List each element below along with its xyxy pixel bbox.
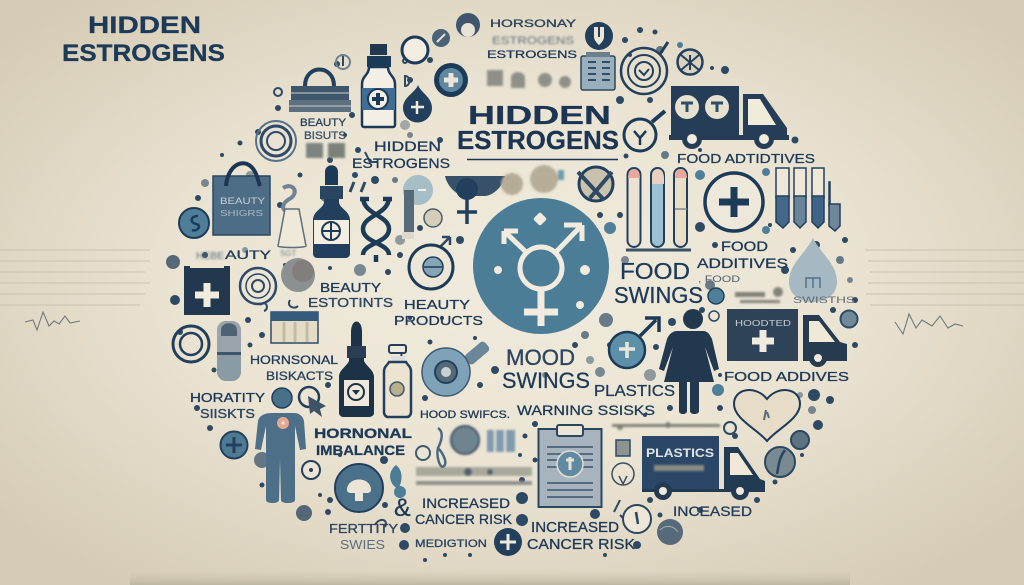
text: beauty estotints: ESTOTINTS — [308, 296, 393, 310]
text: beauty estotints — [308, 281, 393, 310]
icon: tube lamp — [402, 175, 433, 239]
icon: top navy disc — [585, 22, 613, 50]
gender symbol — [504, 225, 582, 326]
text: beauty row: SGT — [280, 249, 297, 258]
icon: three test tubes — [626, 168, 691, 250]
icon: shopping tote top — [289, 70, 351, 112]
icon cluster — [166, 13, 858, 562]
icon: dial ring — [409, 245, 453, 289]
heading: hidden estrogens — [457, 100, 619, 160]
text: increased cancer risk left — [415, 495, 513, 527]
corner title: HIDDEN — [88, 12, 201, 39]
text: increased cancer risk left: INCREASED — [422, 495, 510, 511]
icon: plus disc — [220, 432, 248, 458]
text: beauty label: BISUTS — [304, 130, 346, 142]
text: hidden estrogens small: ESTROGENS — [352, 155, 450, 171]
icon: instrument box — [581, 52, 615, 90]
icon: plus disc — [434, 63, 468, 97]
icon: discs — [765, 431, 809, 477]
text: horsonay estrogens top — [487, 18, 577, 61]
icon: light bottle — [384, 345, 411, 417]
icon: medicine bottle — [362, 44, 395, 127]
icon: pale discs — [501, 165, 564, 195]
icon: rings — [240, 268, 276, 304]
icon: small sphere — [424, 209, 442, 227]
icon: dumbbell dial — [422, 340, 491, 396]
icon: shopping bag — [213, 163, 270, 235]
icon: small ornament — [390, 465, 402, 489]
icon: small disc — [708, 288, 724, 304]
left ECG line — [25, 312, 80, 330]
icon: woman figure — [659, 309, 719, 414]
icon: hooded truck: HOODTED — [735, 318, 791, 328]
icon: person figure — [255, 388, 306, 503]
text: horatity sisks — [190, 391, 266, 421]
text: food addives: FOOD ADDIVES — [724, 369, 849, 384]
icon: medical box — [184, 266, 230, 315]
text: hornsonal biskacts: BISKACTS — [266, 371, 333, 383]
icon: plus disc — [494, 528, 522, 556]
text: warning signs: WARNING SSISKS — [517, 402, 655, 418]
text: hornsonal biskacts: HORNSONAL — [250, 355, 339, 367]
icon: shopping bag: SHIGRS — [220, 209, 263, 218]
icon: sphere — [281, 258, 315, 292]
text: food additives stacked: ADDITIVES — [697, 256, 788, 271]
icon: capsule — [217, 321, 241, 381]
icon: blurred row — [487, 70, 571, 88]
icon: male symbol disc — [609, 318, 659, 368]
text: horsonay estrogens top: HORSONAY — [490, 18, 577, 30]
text: horsonay estrogens top: ESTROGENS — [487, 49, 577, 61]
text: hormonal imbalance: HORNONAL — [314, 425, 413, 441]
icon: ring — [402, 37, 428, 63]
icon: vials — [776, 168, 840, 231]
icon: cone — [278, 209, 306, 248]
icon: magnifier — [624, 111, 665, 151]
text: food swings: SWINGS — [614, 282, 703, 308]
icon: wheel — [678, 50, 702, 74]
icon: ring — [173, 326, 209, 362]
icon: target with handle — [621, 42, 668, 94]
text: mood swings — [502, 345, 590, 393]
text: hidden estrogens small: HIDDEN — [374, 138, 441, 154]
text: beauty estotints: BEAUTY — [320, 281, 382, 295]
text: beauty label: BEAUTY — [300, 117, 347, 129]
text: plastics: PLASTICS — [594, 383, 675, 400]
text: food additives stacked: FOOD — [721, 239, 768, 254]
icon: dropper bottle — [313, 165, 350, 258]
icon: heart — [734, 390, 800, 441]
icon: plus ring — [705, 173, 763, 231]
text: beauty row: AUTY — [225, 248, 271, 262]
icon: plastics truck: PLASTICS — [646, 448, 714, 460]
icon: DNA helix — [360, 197, 392, 262]
icon: box — [271, 312, 318, 343]
text: hornsonal biskacts — [250, 355, 339, 383]
corner title — [62, 12, 225, 67]
icon: sex symbol small — [445, 176, 505, 224]
icon: small disc and grid — [451, 426, 515, 454]
icon: small squares — [306, 143, 345, 158]
icon: crossed ring — [578, 167, 613, 201]
big central circle with gender symbol — [473, 198, 609, 334]
text: food additives stacked — [697, 239, 788, 284]
text: hood swifcs: HOOD SWIFCS. — [420, 409, 510, 421]
text: increased cancer risk right: INCREASED — [531, 520, 619, 536]
corner title: ESTROGENS — [62, 40, 225, 67]
text: fertility swies: FERTTITY — [329, 521, 398, 536]
icon: top blue ring — [456, 13, 480, 37]
text: heauty products — [394, 297, 483, 328]
icon: dark dropper — [339, 322, 374, 417]
icon: concentric rings — [256, 121, 296, 161]
icon: small ring and wrench — [416, 428, 445, 467]
icon: magnifier star — [299, 387, 326, 417]
heading: hidden estrogens: ESTROGENS — [457, 125, 619, 155]
text: horsonay estrogens top: ESTROGENS — [492, 35, 574, 47]
text: food swings — [614, 258, 703, 308]
icon: clipboard — [538, 425, 602, 507]
text: inceased: INCEASED — [673, 503, 752, 519]
icon: shopping bag: BEAUTY — [220, 196, 266, 207]
text: mood swings: MOOD — [506, 345, 575, 370]
text: heauty products: PRODUCTS — [394, 313, 483, 328]
text: beauty row — [196, 248, 297, 262]
icon: bars — [416, 467, 532, 485]
icon: small cylinder — [616, 440, 630, 456]
text: increased cancer risk left: CANCER RISK — [415, 511, 513, 527]
text: mood swings: SWINGS — [502, 368, 590, 393]
icon: blurred row — [612, 422, 720, 430]
text: increased cancer risk right — [527, 520, 635, 553]
icon: teal disc — [179, 208, 209, 238]
text: hormonal imbalance — [314, 425, 413, 458]
text: ampersand: & — [394, 494, 411, 522]
heading: hidden estrogens: HIDDEN — [468, 100, 611, 130]
icon: face ring — [612, 463, 634, 485]
icon: ring — [840, 310, 858, 328]
text: food swings: FOOD — [620, 258, 690, 284]
icon: blurred row — [735, 287, 783, 303]
text: horatity sisks: HORATITY — [190, 391, 266, 405]
icon: mushroom disc — [335, 464, 383, 512]
icon: small ring — [302, 461, 320, 479]
text: swisths: SWISTHS — [793, 295, 855, 306]
icon: grey droplet — [789, 238, 837, 302]
text: beauty row: HEBE — [196, 251, 224, 262]
icon: small disc — [432, 29, 450, 47]
icon: hooded truck — [727, 309, 847, 367]
icon: blob — [657, 519, 683, 545]
text: hormonal imbalance: IMBALANCE — [316, 442, 405, 458]
icon: plastics truck — [642, 436, 765, 500]
text: food additives stacked: , FOOD — [698, 274, 741, 284]
text: heauty products: HEAUTY — [404, 297, 470, 312]
text: increased cancer risk right: CANCER RISK — [527, 537, 635, 553]
icon: plus droplet — [403, 85, 432, 123]
small glyph marks — [260, 55, 645, 527]
text: horatity sisks: SIISKTS — [200, 407, 255, 421]
text: hidden estrogens small — [352, 138, 450, 171]
text: medication: MEDIGTION — [415, 538, 487, 550]
right ECG line — [895, 314, 963, 334]
icon: food truck — [669, 86, 789, 149]
text: fertility swies: SWIES — [340, 537, 385, 552]
scattered dots — [166, 27, 858, 562]
icon: small ring — [623, 505, 651, 533]
text: food adtidtives: FOOD ADTIDTIVES — [677, 151, 815, 166]
text: beauty label — [300, 117, 347, 142]
text: fertility swies — [329, 521, 398, 552]
